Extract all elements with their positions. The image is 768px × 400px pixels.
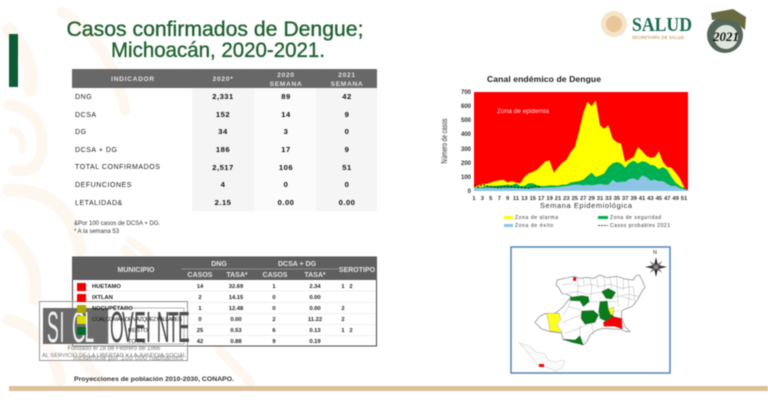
row values: 0 <box>284 180 288 189</box>
table header: 2021 <box>338 72 356 79</box>
row values: 106 <box>279 163 293 172</box>
row values: 152 <box>216 110 230 119</box>
table header: 2020 <box>277 72 295 79</box>
row values: 9 <box>345 145 349 154</box>
y axis: 200 <box>461 161 472 167</box>
x axis: 31 <box>597 196 604 202</box>
source note: Proyecciones de población 2010-2030, CONAPO. <box>74 376 234 383</box>
x axis: 1 <box>472 196 476 202</box>
logo: Secretaría de Salud <box>601 11 692 40</box>
x axis: 43 <box>647 196 654 202</box>
row values <box>212 92 355 207</box>
x axis: 51 <box>681 196 688 202</box>
x axis: 23 <box>563 196 570 202</box>
x axis: 9 <box>506 196 510 202</box>
footer strip <box>9 386 768 391</box>
municipios rows: 11.22 <box>308 317 322 323</box>
row values: 42 <box>342 92 352 101</box>
zone label: Zona de epidemia <box>497 108 549 115</box>
municipios rows: 1 2 <box>341 328 353 334</box>
municipios rows: 2 <box>341 317 345 323</box>
row values: 17 <box>281 145 291 154</box>
x axis: 29 <box>588 196 596 202</box>
municipios rows: 2 <box>198 295 202 301</box>
municipios rows: 9 <box>272 339 276 345</box>
row labels: DEFUNCIONES <box>75 182 132 189</box>
table footnotes: &Por 100 casos de DCSA + DG. <box>74 221 161 227</box>
row values: 0.00 <box>278 198 294 207</box>
municipios rows: 2 <box>272 317 276 323</box>
row labels: LETALIDAD& <box>75 200 123 207</box>
legend: Zona de alarma <box>515 215 558 221</box>
x axis: 17 <box>538 196 544 202</box>
municipios rows: 6 <box>272 328 276 334</box>
municipios header: DCSA + DG <box>278 261 317 268</box>
table footnotes: * A la semana 53 <box>74 229 120 235</box>
municipios rows: 0.00 <box>230 317 242 323</box>
row values: 14 <box>281 110 291 119</box>
municipios rows: COALCOMÁN DE VÁZQUEZ PALLARES <box>92 316 182 323</box>
table header <box>72 69 377 88</box>
x axis title: Semana Epidemiológica <box>540 201 633 210</box>
municipios header <box>72 257 377 280</box>
row values: 2,517 <box>212 163 234 172</box>
x axis: 45 <box>656 196 663 202</box>
municipios header: TASA* <box>304 272 326 279</box>
map municipalities <box>563 288 616 345</box>
row labels: DG <box>75 129 87 136</box>
accent bar <box>9 34 18 87</box>
municipios rows: 12.48 <box>229 306 244 312</box>
y axis: 100 <box>461 175 472 181</box>
risk colour markers <box>77 283 86 335</box>
municipios rows: 1 <box>272 284 276 290</box>
municipios rows: TOTAL <box>128 339 147 345</box>
x axis: 27 <box>580 196 586 202</box>
row values: 0 <box>345 180 349 189</box>
title: Michoacán, 2020-2021. <box>111 39 325 62</box>
x axis: 25 <box>572 196 579 202</box>
row values: 2,331 <box>212 92 234 101</box>
row values: 186 <box>216 145 230 154</box>
chart title: Canal endémico de Dengue <box>487 74 601 84</box>
table footnotes <box>74 221 161 235</box>
municipios rows: RESTO <box>128 328 148 334</box>
municipios rows: 2.34 <box>309 284 321 290</box>
table: municipios frame <box>72 257 377 346</box>
municipios rows: 32.69 <box>229 284 244 290</box>
municipios rows: 0 <box>272 306 276 312</box>
municipios rows: 0.13 <box>309 328 321 334</box>
municipios header: CASOS <box>263 272 288 279</box>
municipios rows: 2 <box>341 306 345 312</box>
row values: 51 <box>342 163 352 172</box>
logo: Secretaría de Salud: SALUD <box>632 14 692 36</box>
table header: 2020* <box>213 76 233 83</box>
table header: SEMANA <box>331 81 363 88</box>
logo: 2021 badge <box>707 9 746 53</box>
row labels <box>75 94 160 207</box>
municipios header: CASOS <box>188 272 213 279</box>
inset map of Mexico <box>519 343 565 371</box>
row values: 0.00 <box>339 198 355 207</box>
row values: 0 <box>345 127 349 136</box>
chart left mask <box>468 92 474 191</box>
row labels: DNG <box>75 94 92 101</box>
x axis: 35 <box>614 196 621 202</box>
x axis: 21 <box>555 196 562 202</box>
x axis: 49 <box>672 196 680 202</box>
row values: 4 <box>221 180 226 189</box>
municipios rows: NOCUPÉTARO <box>92 304 133 312</box>
row values: 34 <box>218 127 228 136</box>
municipios rows: 25 <box>197 328 204 334</box>
watermark: Siglo Veinte: OVEINTE <box>110 304 190 353</box>
row labels: DCSA + DG <box>75 147 118 154</box>
x axis: 41 <box>639 196 646 202</box>
row values: 2.15 <box>215 198 232 207</box>
municipios header: MUNICIPIO <box>118 267 155 274</box>
y axis: 600 <box>461 104 472 110</box>
municipios rows: HUETAMO <box>92 284 121 290</box>
municipios rows: IXTLAN <box>92 295 113 301</box>
icon: compass <box>645 250 667 277</box>
row values: 89 <box>281 92 291 101</box>
watermark: Siglo Veinte: SIGL <box>47 304 94 353</box>
logo: Secretaría de Salud: SECRETARÍA DE SALUD <box>632 35 684 40</box>
table header: SEMANA <box>270 81 302 88</box>
municipios rows: 0.53 <box>230 328 242 334</box>
x axis: 19 <box>546 196 554 202</box>
municipios rows: 0.00 <box>309 306 321 312</box>
table: indicators <box>72 69 377 211</box>
x axis: 47 <box>664 196 670 202</box>
municipios rows <box>92 284 353 345</box>
legend: Zona de éxito <box>515 223 553 229</box>
municipios header: SEROTIPO <box>339 267 376 274</box>
legend: Zona de seguridad <box>610 215 661 221</box>
y axis: 500 <box>461 118 472 124</box>
x axis: 11 <box>513 196 520 202</box>
y axis: 700 <box>461 90 472 96</box>
y axis title: Número de casos <box>441 118 449 164</box>
table header: INDICADOR <box>111 76 155 83</box>
title <box>66 18 364 62</box>
icon: compass: N <box>653 250 657 256</box>
x axis: 33 <box>605 196 612 202</box>
watermark: Siglo Veinte: AL SERVICIO DE LA LIBERTAD Y LA JUSTICIA SOCIAL <box>42 353 186 359</box>
municipios rows: 0.88 <box>230 339 242 345</box>
municipios rows: 1 2 <box>341 284 353 290</box>
x axis: 39 <box>630 196 638 202</box>
y axis <box>461 90 472 195</box>
municipios rows: 42 <box>197 339 203 345</box>
watermark: Siglo Veinte <box>40 302 190 360</box>
municipios header: TASA* <box>226 272 248 279</box>
row labels: TOTAL CONFIRMADOS <box>75 164 160 171</box>
row values: 3 <box>284 127 288 136</box>
legend <box>504 215 670 229</box>
municipios rows: 14.15 <box>229 295 244 301</box>
x axis: 7 <box>498 196 501 202</box>
y axis: 0 <box>468 189 472 195</box>
x axis: 3 <box>481 196 485 202</box>
municipios rows: 0.19 <box>309 339 321 345</box>
municipios rows: 0 <box>272 295 276 301</box>
x axis <box>472 196 688 202</box>
incidence note: Incidencia por 100 000 habitantes <box>73 355 184 362</box>
y axis: 400 <box>461 132 472 138</box>
municipios rows: 0.00 <box>309 295 321 301</box>
municipios header: DNG <box>211 261 227 268</box>
legend: Casos probables 2021 <box>610 223 670 229</box>
municipios rows: 1 <box>198 306 202 312</box>
x axis: 37 <box>622 196 628 202</box>
row values: 9 <box>345 110 349 119</box>
state outline <box>535 275 645 345</box>
watermark: Siglo Veinte: Fundado el 28 de Febrero de 1966 <box>68 346 161 352</box>
x axis: 15 <box>530 196 537 202</box>
x axis: 13 <box>521 196 528 202</box>
municipios rows: 0 <box>198 317 202 323</box>
map panel <box>511 247 670 373</box>
logo: 2021 badge: 2021 <box>712 29 739 44</box>
y axis: 300 <box>461 147 472 153</box>
chart: canal endémico <box>441 74 688 229</box>
x axis: 5 <box>489 196 493 202</box>
row labels: DCSA <box>75 112 97 119</box>
municipios rows: 14 <box>197 284 204 290</box>
title: Casos confirmados de Dengue; <box>66 18 364 41</box>
